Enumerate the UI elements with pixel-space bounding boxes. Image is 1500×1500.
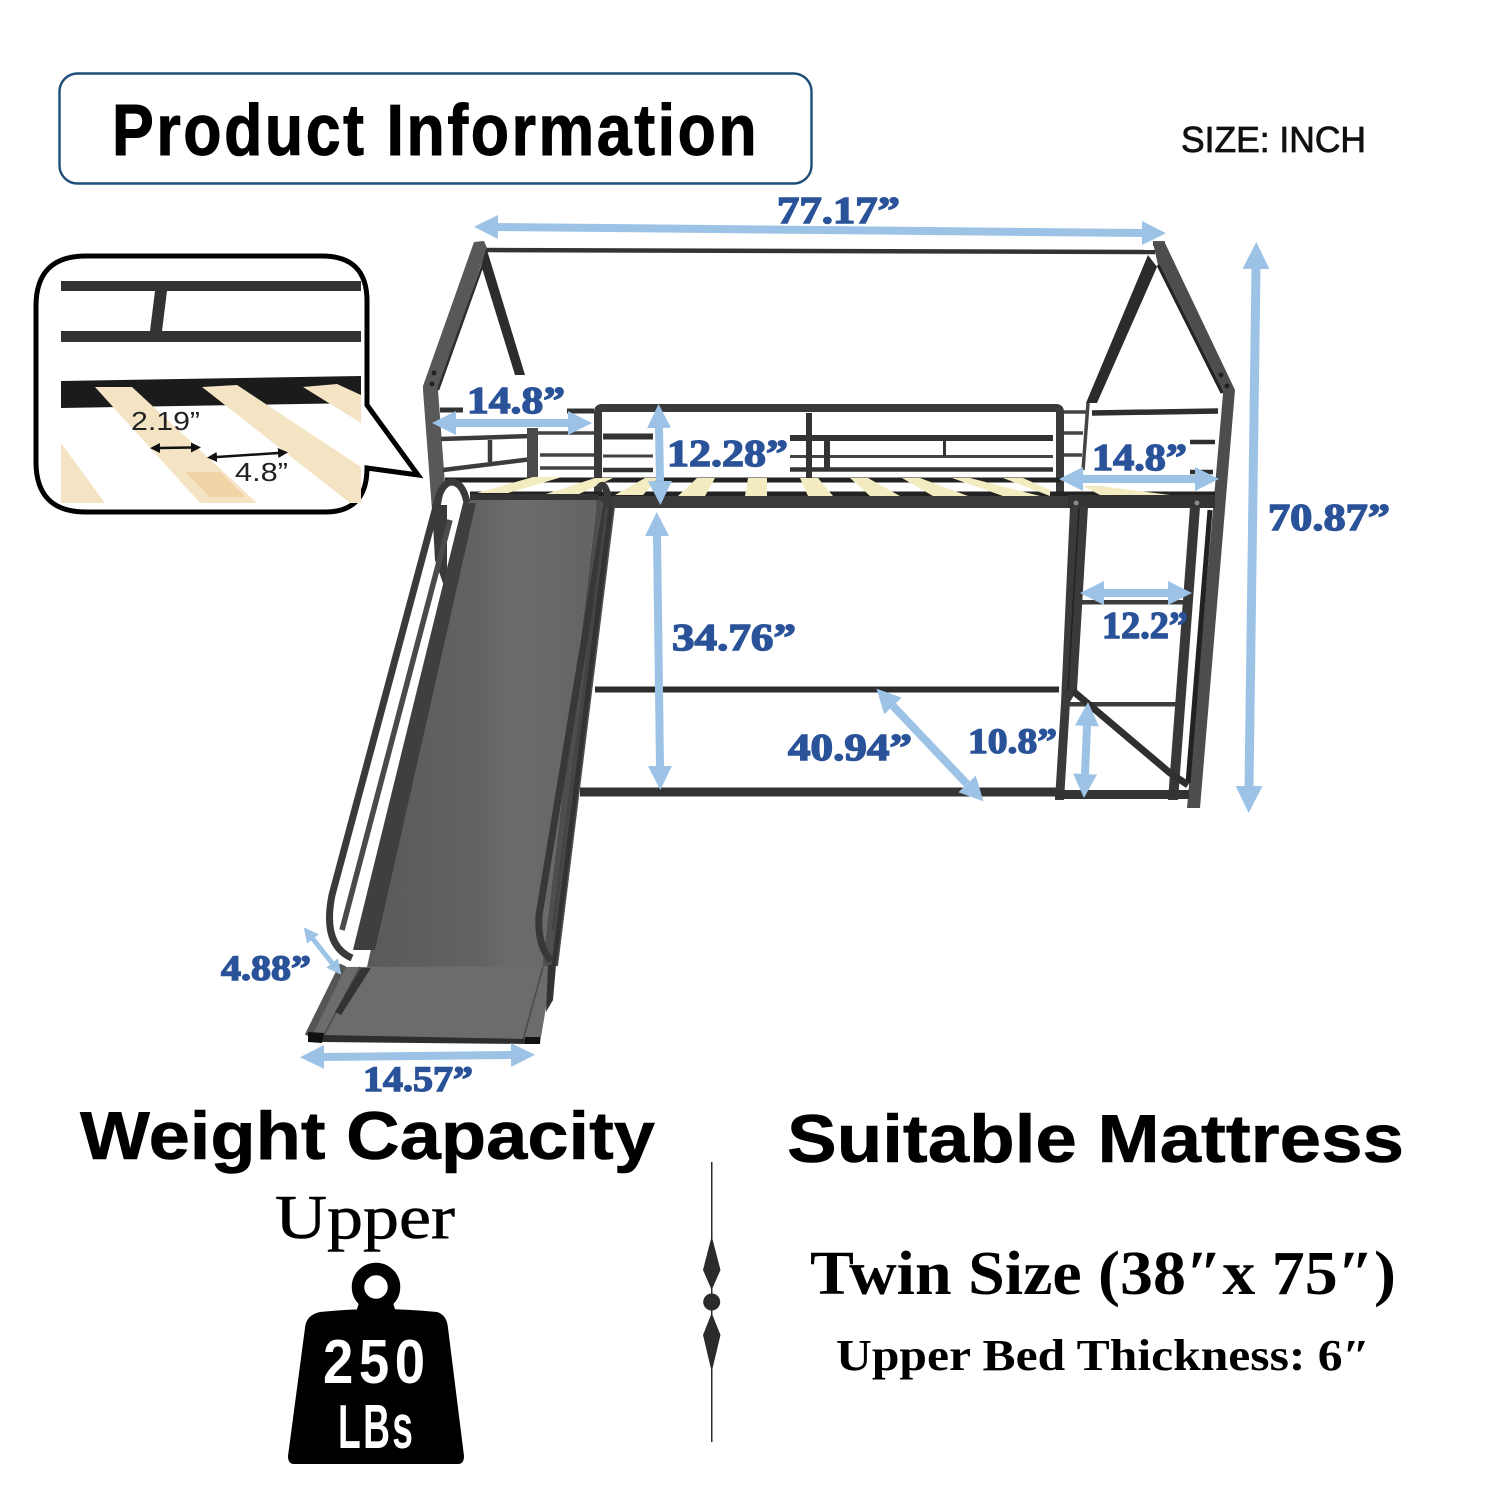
callout: slat detail (36, 256, 418, 512)
dimension labels: 14.8” (1092, 437, 1187, 479)
ornamental divider (703, 1162, 720, 1442)
text: twin size: Twin Size (38″x 75″) (810, 1240, 1396, 1308)
lower frame rails (580, 686, 1059, 796)
mattress slats (445, 477, 1215, 496)
icon: weight 250 lbs (288, 1269, 464, 1464)
dimension labels: 34.76” (672, 617, 796, 659)
icon: weight 250 lbs: LBs (338, 1392, 413, 1461)
dimension labels: 12.28” (667, 433, 788, 475)
dimension labels: 70.87” (1268, 497, 1390, 539)
dimension labels: 4.88” (221, 948, 311, 988)
dimension labels: 77.17” (777, 190, 900, 232)
bed side rail (470, 495, 1215, 508)
callout: slat detail: 2.19” (131, 406, 200, 436)
ridge bar (485, 250, 1155, 252)
left gable (423, 241, 594, 595)
dimension labels: 14.57” (363, 1059, 473, 1099)
dimension arrows (313, 227, 1256, 1057)
slat detail drawing (61, 281, 361, 503)
right gable (430, 241, 1235, 808)
dimension labels: 12.2” (1102, 605, 1188, 647)
slide (308, 482, 615, 1044)
title box: Product Information (112, 91, 757, 171)
bed frame (308, 241, 1235, 1044)
heading: suitable mattress: Suitable Mattress (787, 1101, 1404, 1177)
size unit label: SIZE: INCH (1181, 119, 1366, 160)
icon: weight 250 lbs: 250 (323, 1328, 425, 1397)
label: upper: Upper (275, 1184, 455, 1252)
heading: weight capacity: Weight Capacity (80, 1098, 655, 1174)
callout: slat detail: 4.8” (235, 457, 288, 487)
title box (60, 74, 812, 184)
dimension labels: 40.94” (788, 727, 912, 769)
dimension labels: 14.8” (467, 380, 565, 422)
ladder (1055, 507, 1210, 800)
guard rail (598, 408, 1060, 497)
dimension labels (221, 190, 1390, 1099)
text: upper bed thickness: Upper Bed Thickness: 6″ (836, 1331, 1370, 1380)
dimension labels: 10.8” (968, 721, 1057, 761)
